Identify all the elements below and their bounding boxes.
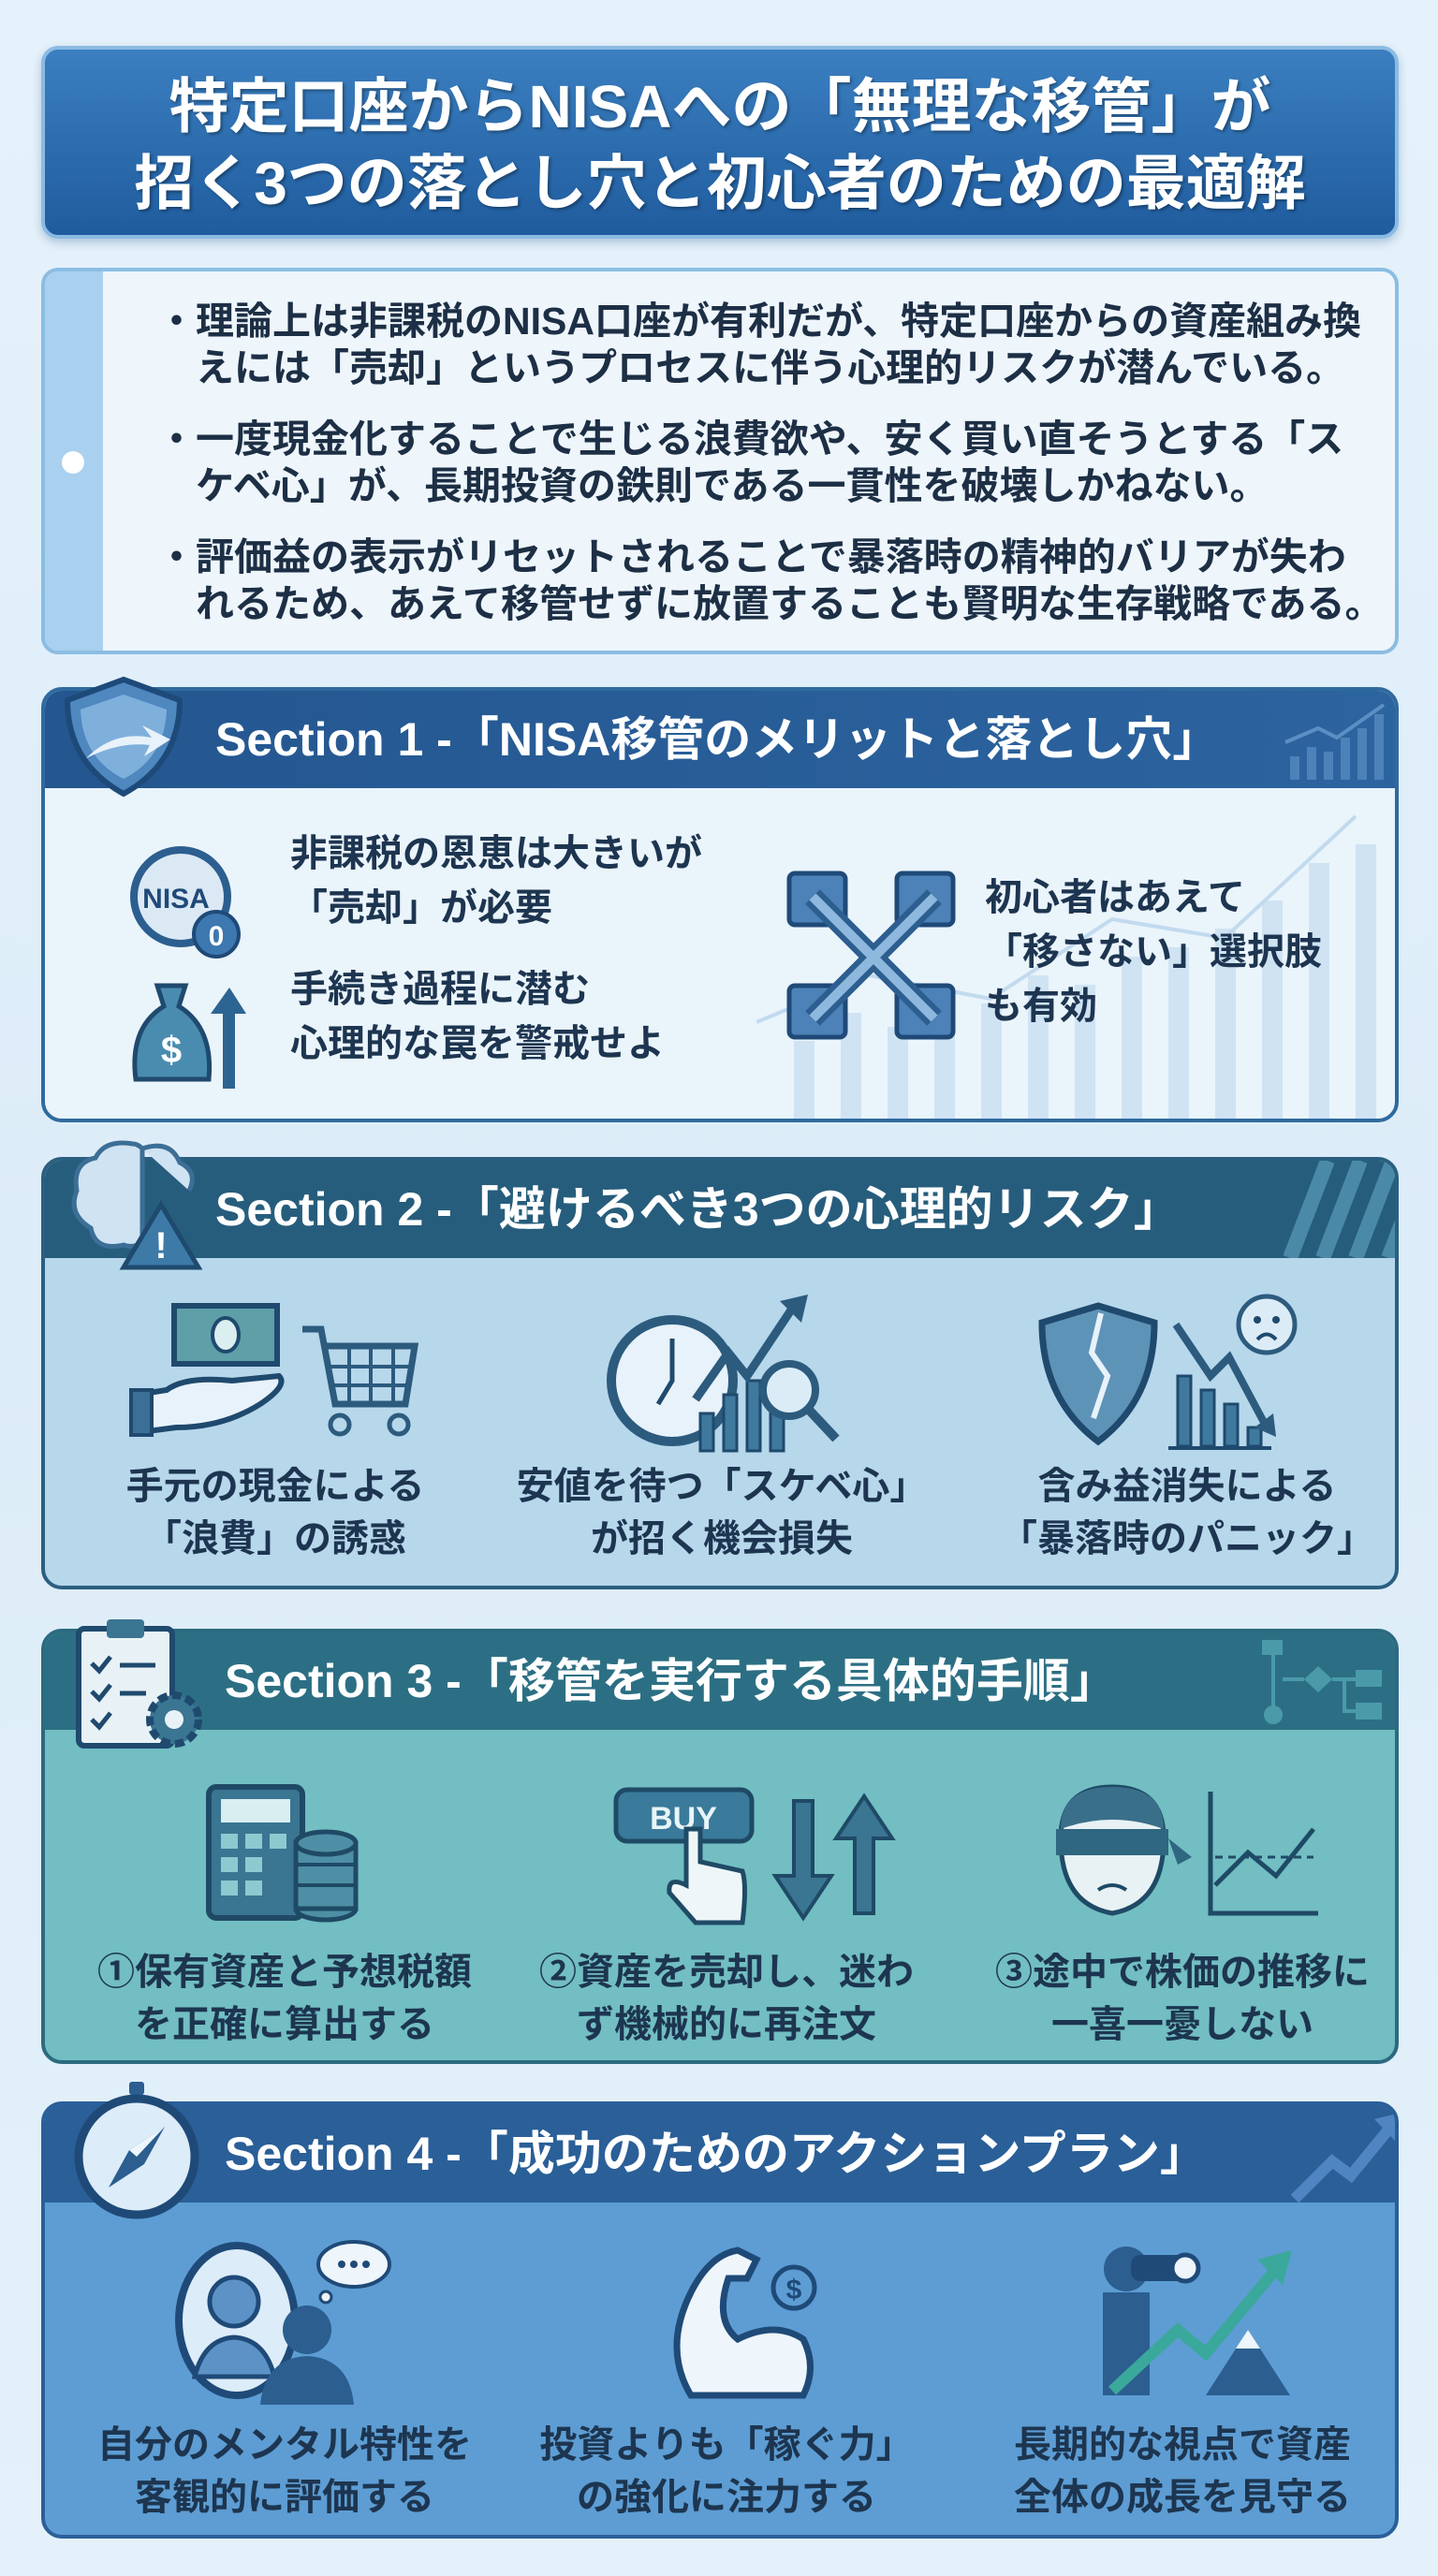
flowchart deco: [1262, 1640, 1382, 1724]
text: item 2: 心理的な罠を警戒せよ: [290, 1023, 665, 1064]
header text 3: Section 3 -「移管を実行する具体的手順」: [225, 1655, 1117, 1707]
text: item 3: 「移さない」選択肢: [985, 931, 1322, 973]
header text 4: Section 4 -「成功のためのアクションプラン」: [225, 2128, 1207, 2180]
icon: mirror person: [175, 2240, 391, 2405]
summary panel: [41, 268, 1399, 654]
text: item 1: [290, 833, 702, 929]
title banner: 招く3つの落とし穴と初心者のための最適解: [134, 150, 1306, 217]
panel: section 2: [41, 1157, 1399, 1589]
text: step 3: [995, 1952, 1370, 2045]
text: risk 3: [1000, 1466, 1374, 1559]
text: action 3: 長期的な視点で資産: [1014, 2424, 1351, 2466]
side strip: [45, 271, 103, 651]
text: step 1: を正確に算出する: [135, 2004, 434, 2045]
icon: blindfold chart: [1056, 1784, 1318, 1915]
icon: flexed arm dollar: $: [786, 2275, 802, 2305]
header text 1: Section 1 -「NISA移管のメリットと落とし穴」: [215, 713, 1219, 766]
icon: clipboard gear (section 3): [76, 1619, 202, 1749]
summary bullets: れるため、あえて移管せずに放置することも賢明な生存戦略である。: [196, 582, 1384, 625]
icon: NISA coin: 0: [209, 921, 224, 952]
panel: section 4: [41, 2101, 1399, 2539]
text: action 1: 客観的に評価する: [135, 2477, 434, 2518]
panel: section 1: [41, 687, 1399, 1122]
icon: shield (section 1): [65, 676, 183, 798]
icon: NISA coin: NISA: [142, 884, 210, 915]
text: risk 1: 手元の現金による: [126, 1466, 424, 1507]
text: item 3: 初心者はあえて: [985, 877, 1245, 918]
panel: section 3: [41, 1629, 1399, 2064]
text: action 3: 全体の成長を見守る: [1014, 2477, 1351, 2518]
icon: brain warning (section 2): [71, 1140, 202, 1269]
header text 2: Section 2 -「避けるべき3つの心理的リスク」: [215, 1183, 1181, 1236]
text: risk 2: 安値を待つ「スケベ心」: [517, 1466, 927, 1507]
text: step 2: ず機械的に再注文: [577, 2004, 876, 2045]
icon: exchange arrows: [786, 871, 955, 1039]
text: item 2: [290, 969, 665, 1064]
text: item 3: [985, 877, 1322, 1027]
text: step 2: [539, 1952, 914, 2045]
text: action 2: の強化に注力する: [577, 2477, 876, 2518]
icon: BUY button arrows: BUY: [650, 1801, 717, 1837]
icon: brain warning (section 2): !: [154, 1225, 168, 1266]
icon: hand cash cart: [129, 1303, 419, 1437]
text: item 1: 非課税の恩恵は大きいが: [290, 833, 702, 874]
text: risk 1: [126, 1466, 424, 1559]
stripes deco: [1283, 1161, 1395, 1258]
header band 3: [45, 1632, 1395, 1730]
title banner: 特定口座からNISAへの「無理な移管」が: [169, 73, 1270, 140]
background chart decoration: [756, 814, 1376, 1119]
text: action 1: 自分のメンタル特性を: [97, 2424, 472, 2466]
summary bullets: ・評価益の表示がリセットされることで暴落時の精神的バリアが失わ: [157, 535, 1346, 578]
text: item 1: 「売却」が必要: [290, 887, 552, 929]
icon: clock chart magnifier: [607, 1295, 840, 1453]
header chart deco: [1284, 704, 1385, 780]
icon: flexed arm dollar: [674, 2247, 816, 2398]
icon: BUY button arrows: [614, 1788, 896, 1925]
text: step 1: [97, 1952, 472, 2045]
text: risk 3: 含み益消失による: [1038, 1466, 1336, 1507]
icon: broken shield down chart: [1039, 1294, 1298, 1450]
text: action 3: [1014, 2424, 1351, 2518]
title banner: [41, 46, 1399, 239]
text: step 1: ①保有資産と予想税額: [97, 1952, 472, 1993]
summary bullets: ・理論上は非課税のNISA口座が有利だが、特定口座からの資産組み換: [157, 300, 1361, 343]
text: action 2: 投資よりも「稼ぐ力」: [539, 2424, 914, 2466]
text: action 1: [97, 2424, 472, 2518]
text: risk 2: が招く機会損失: [591, 1518, 853, 1559]
text: risk 2: [517, 1466, 927, 1559]
text: risk 3: 「暴落時のパニック」: [1000, 1518, 1374, 1559]
text: step 2: ②資産を売却し、迷わ: [539, 1952, 914, 1993]
summary bullets: [157, 300, 1384, 625]
header band 2: [45, 1161, 1395, 1258]
icon: calculator coins: [206, 1784, 358, 1923]
arrow deco: [1290, 2115, 1395, 2203]
summary bullets: ・一度現金化することで生じる浪費欲や、安く買い直そうとする「ス: [157, 417, 1343, 461]
text: item 3: も有効: [985, 986, 1097, 1027]
icon: binoculars growth: [1103, 2247, 1292, 2395]
summary bullets: えには「売却」というプロセスに伴う心理的リスクが潜んでいる。: [196, 346, 1344, 389]
header band 4: [45, 2105, 1395, 2203]
summary bullets: ケベ心」が、長期投資の鉄則である一貫性を破壊しかねない。: [196, 464, 1269, 507]
text: step 3: ③途中で株価の推移に: [995, 1952, 1370, 1993]
icon: money bag with arrow: $: [161, 1030, 182, 1071]
icon: NISA coin: [130, 846, 241, 959]
icon: compass (section 4): [75, 2082, 198, 2218]
icon: money bag with arrow: [132, 983, 246, 1089]
header band 1: [45, 691, 1395, 788]
text: item 2: 手続き過程に潜む: [290, 969, 590, 1010]
text: risk 1: 「浪費」の誘惑: [144, 1518, 406, 1559]
text: step 3: 一喜一憂しない: [1051, 2004, 1313, 2045]
text: action 2: [539, 2424, 914, 2518]
